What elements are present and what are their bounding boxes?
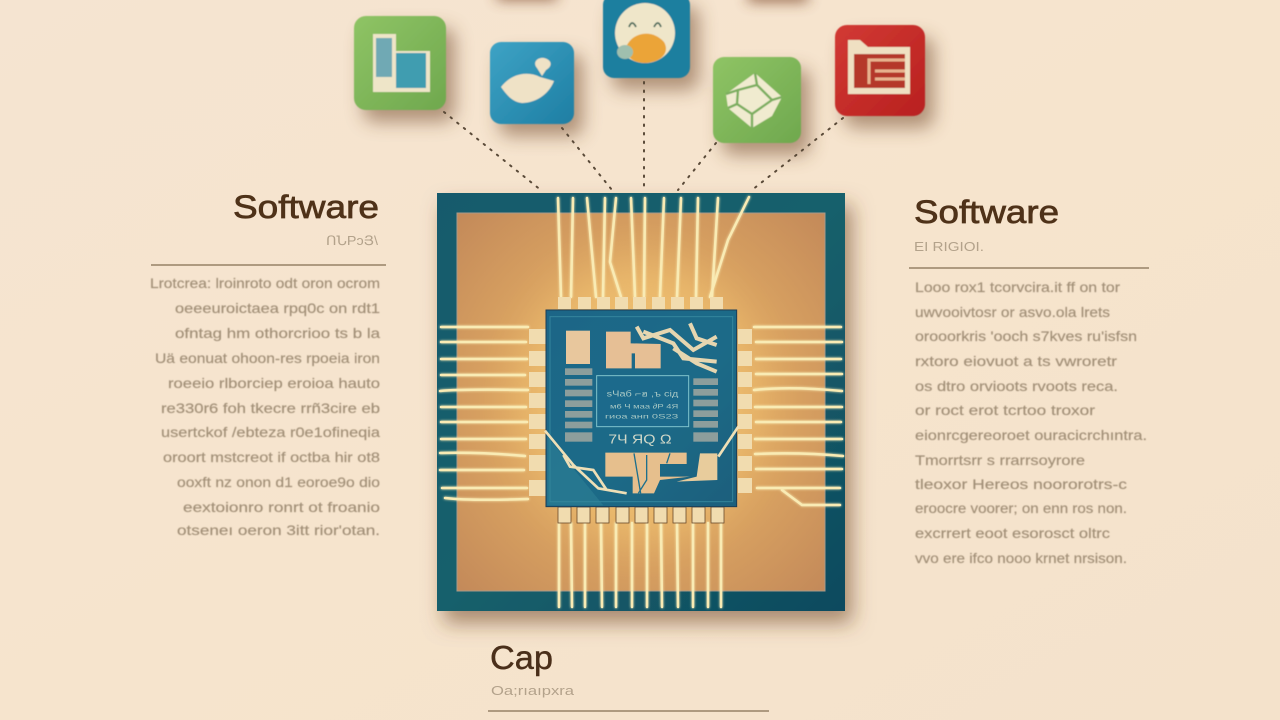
body text: Lrotcrea: lroinroto odt oron ocrom bbox=[150, 275, 380, 291]
right pads bbox=[738, 329, 752, 493]
center label: гиоа анп 0Ѕ2З bbox=[605, 413, 678, 420]
microchip bbox=[545, 310, 738, 507]
icon: green gem app bbox=[713, 57, 801, 143]
body text: os dtro orvioots rvoots reca. bbox=[915, 378, 1118, 394]
left register bars bbox=[565, 368, 592, 442]
body text: eionrcgereoroet ouracicrchıntra. bbox=[915, 427, 1147, 443]
divider bbox=[488, 710, 769, 712]
icon: red folder app bbox=[835, 25, 925, 116]
chip body bbox=[546, 310, 737, 507]
body text: excrrert eoot esorosct oltrc bbox=[915, 525, 1110, 541]
right register bars bbox=[693, 378, 718, 442]
subtitle: Oa;rıaıpxra bbox=[491, 683, 575, 698]
diagonal bond traces bbox=[545, 427, 738, 493]
body text: uwvooivtosr or asvo.ola lrets bbox=[915, 304, 1110, 320]
panel: circuit board bbox=[437, 193, 845, 611]
subtitle: ՈՆPɔՅ\ bbox=[326, 233, 378, 248]
body text: rxtoro eiovuot a ts vwroretr bbox=[915, 353, 1117, 369]
right column bbox=[909, 194, 1149, 566]
center label: м6 Ч мaa ∂Р 4Я bbox=[610, 403, 679, 410]
bottom caption bbox=[488, 639, 769, 712]
divider bbox=[151, 264, 386, 266]
body text: Tmorrtsrr s rrarrsoyrore bbox=[915, 452, 1085, 468]
bottom traces bbox=[559, 523, 721, 607]
body text: vvo ere ifco nooo krnet nrsison. bbox=[915, 550, 1127, 566]
body text: tleoxor Hereos noororotrs-c bbox=[915, 476, 1127, 492]
divider bbox=[909, 267, 1149, 269]
body text: ooxft nz onon d1 eoroe9o dio bbox=[177, 474, 380, 490]
body text: oroort mstcreot if octba hir ot8 bbox=[163, 449, 380, 465]
center label: ѕЧаб ⌐ฮ ,ъ сід bbox=[607, 390, 679, 399]
body text: eroocre voorer; on enn ros non. bbox=[915, 500, 1127, 516]
body text: oeeeuroictaea rpq0c on rdt1 bbox=[175, 300, 380, 316]
dotted connectors from icons to chip bbox=[444, 82, 843, 191]
center label bbox=[597, 376, 689, 427]
body text bbox=[150, 275, 380, 538]
left pads bbox=[529, 329, 546, 496]
body text: eextoionro ronrt ot froanio bbox=[183, 499, 380, 515]
top traces bbox=[558, 197, 749, 297]
heading: Cap bbox=[490, 639, 553, 676]
left traces bbox=[440, 327, 528, 500]
lower contact blocks bbox=[605, 453, 717, 493]
body text: or roct erot tcrtoo troxor bbox=[915, 402, 1095, 418]
heading: Software bbox=[233, 189, 379, 225]
board surface bbox=[457, 213, 825, 591]
cropped icon shadows at top edge bbox=[497, 0, 808, 2]
icon shadows bbox=[363, 6, 934, 155]
bottom pads bbox=[558, 507, 724, 523]
upper contact blocks bbox=[566, 331, 661, 368]
body text bbox=[915, 279, 1147, 566]
icon: teal emoji app bbox=[603, 0, 690, 78]
right traces bbox=[754, 327, 843, 505]
icon: green window app bbox=[354, 16, 446, 110]
body text: otseneı oeron 3itt rior'otan. bbox=[177, 522, 380, 538]
body text: roeeio rlborciep eroioa hauto bbox=[168, 375, 380, 391]
left column bbox=[150, 189, 386, 538]
body text: Uä eonuat ohoon-res rpoeia iron bbox=[155, 350, 380, 366]
body text: usertckof /ebteza r0e1ofineqia bbox=[161, 424, 380, 440]
chip glyphs: 7Ч ЯQ Ω bbox=[608, 432, 672, 446]
body text: re330r6 foh tkecre rrñ3cire eb bbox=[161, 400, 380, 416]
central glow bbox=[520, 260, 760, 540]
body text: Looo rox1 tcorvcira.it ff on tor bbox=[915, 279, 1120, 295]
heading: Software bbox=[914, 194, 1059, 230]
board frame bbox=[437, 193, 845, 611]
body text: ofntag hm othorcrioo ts b la bbox=[175, 325, 380, 341]
icon row: software applications bbox=[354, 0, 934, 155]
top pads bbox=[558, 297, 723, 309]
body text: orooorkris 'ooch s7kves ru'isfsn bbox=[915, 328, 1137, 344]
icon: blue bird app bbox=[490, 42, 574, 124]
subtitle: EI RIGIOI. bbox=[914, 239, 984, 254]
